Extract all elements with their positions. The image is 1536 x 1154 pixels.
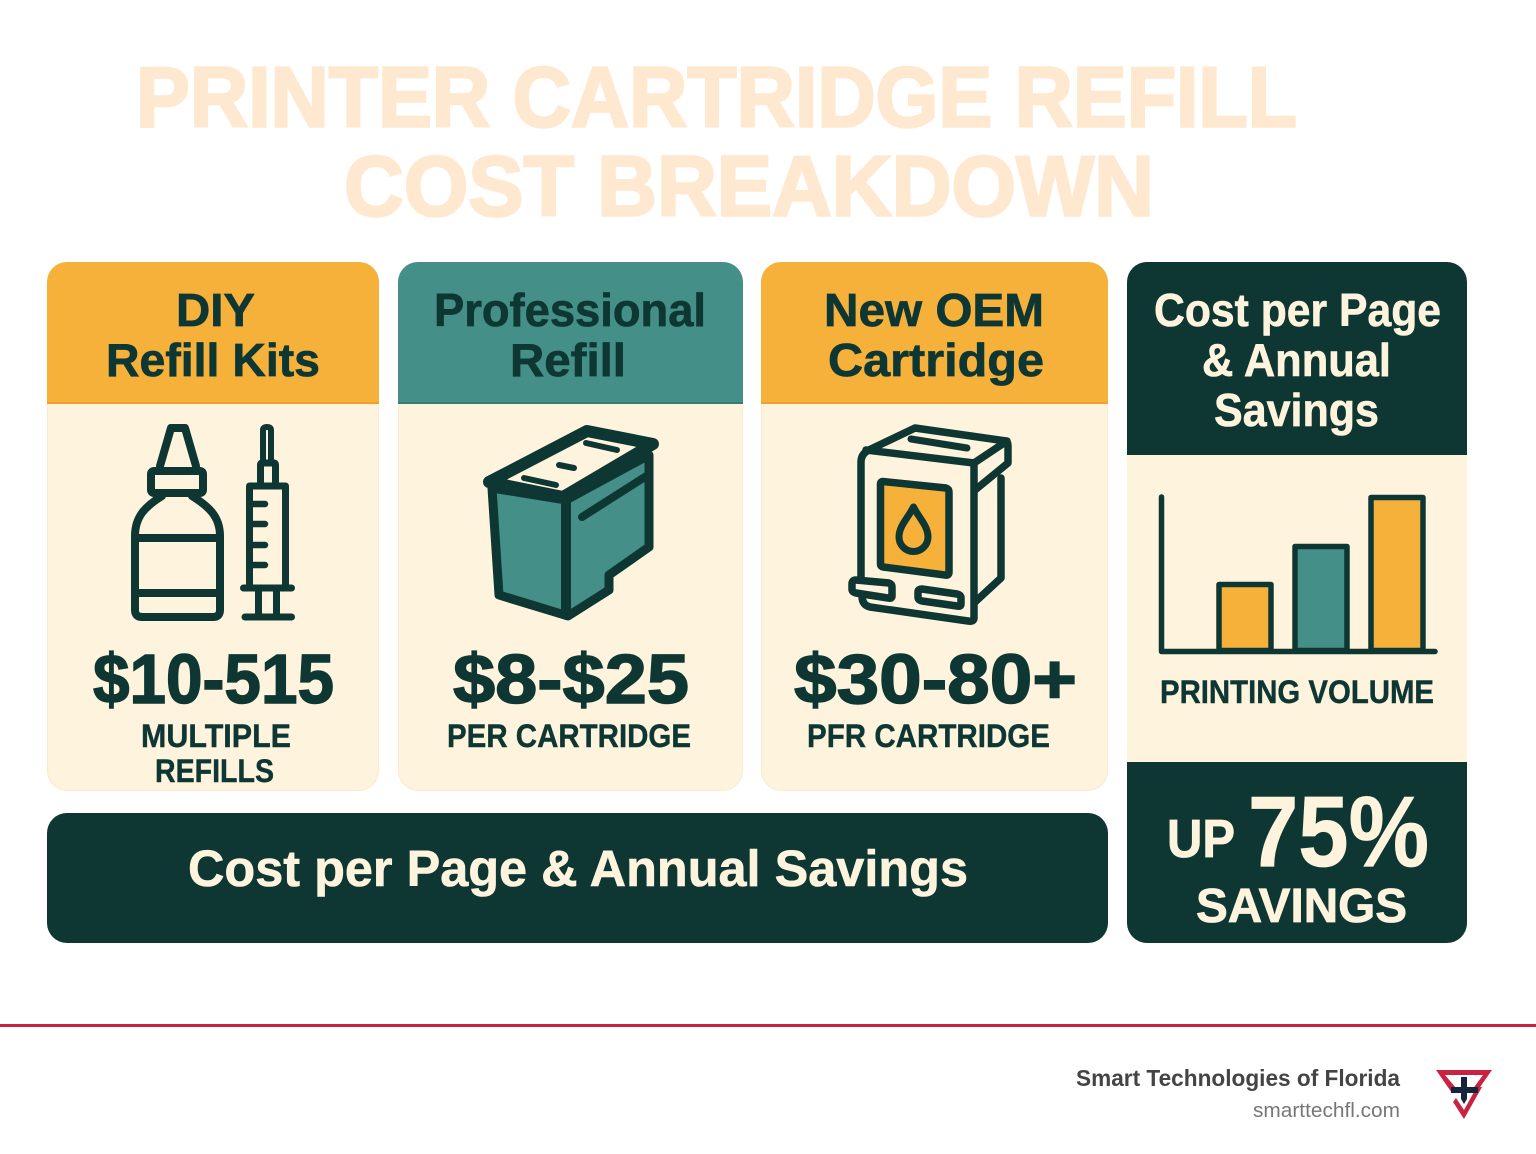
title (136, 50, 1297, 234)
heading: new OEM cartridge: New OEM (824, 284, 1044, 336)
heading: DIY refill kits (106, 284, 320, 386)
caption: multiple refills: MULTIPLE (141, 718, 291, 754)
logo (1436, 1070, 1492, 1119)
heading: cost per page (1154, 284, 1441, 436)
banner: cost per page and annual savings (47, 813, 1108, 943)
callout: up to 75 percent savings: UP (1167, 809, 1235, 869)
caption: multiple refills (141, 718, 291, 789)
caption: per cartridge: PER CARTRIDGE (447, 718, 691, 754)
panel: professional refill (398, 262, 743, 790)
title: COST BREAKDOWN (344, 140, 1154, 234)
icon: OEM cartridge (852, 428, 1008, 621)
heading: professional refill: Professional (434, 284, 706, 336)
price: OEM: $30-80+ (794, 640, 1077, 718)
footer: company name: Smart Technologies of Florida (1076, 1065, 1400, 1091)
banner: cost per page and annual savings: Cost per Page & Annual Savings (188, 840, 968, 897)
callout: up to 75 percent savings (1167, 776, 1429, 933)
bar chart: printing volume (1162, 497, 1435, 652)
icon: teal cartridge (489, 431, 653, 616)
icon: ink bottle (135, 428, 220, 617)
heading: professional refill (434, 284, 706, 386)
panel: new OEM cartridge (761, 262, 1108, 790)
heading: professional refill: Refill (510, 334, 626, 386)
icon: syringe (244, 427, 292, 617)
caption: multiple refills: REFILLS (155, 753, 274, 789)
panel: DIY refill kits (47, 262, 379, 790)
heading: new OEM cartridge: Cartridge (828, 334, 1044, 386)
footer: website: smarttechfl.com (1253, 1100, 1400, 1122)
heading: cost per page: Cost per Page (1154, 284, 1441, 336)
caption: pfr cartridge: PFR CARTRIDGE (807, 718, 1050, 754)
price: professional: $8-$25 (453, 640, 689, 718)
heading: DIY refill kits: DIY (176, 284, 255, 336)
callout: up to 75 percent savings: 75% (1248, 776, 1429, 888)
panel: cost per page and savings (1127, 262, 1467, 943)
callout: up to 75 percent savings: SAVINGS (1196, 880, 1407, 933)
heading: new OEM cartridge (824, 284, 1044, 386)
heading: cost per page: & Annual (1202, 334, 1391, 386)
title: PRINTER CARTRIDGE REFILL (136, 50, 1297, 146)
chart label: PRINTING VOLUME (1160, 674, 1434, 710)
heading: DIY refill kits: Refill Kits (106, 334, 320, 386)
price: DIY: $10-515 (93, 640, 334, 718)
heading: cost per page: Savings (1214, 384, 1379, 436)
footer rule (0, 1024, 1536, 1027)
